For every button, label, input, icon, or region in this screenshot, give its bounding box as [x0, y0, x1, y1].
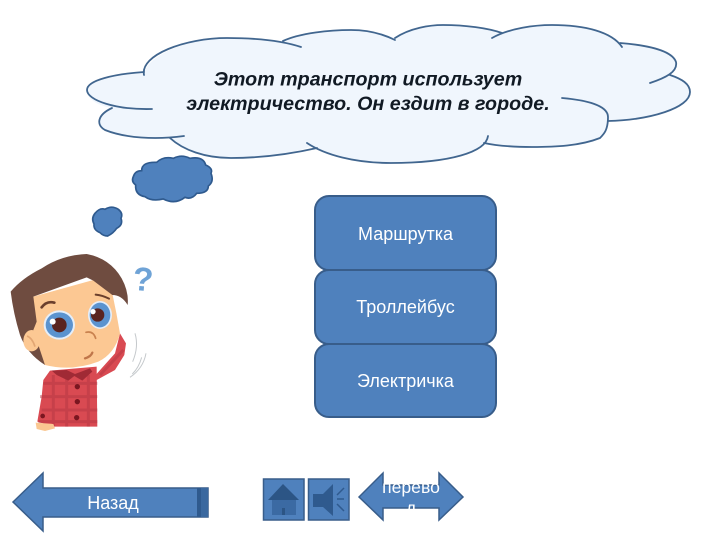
shirt plaid	[38, 350, 123, 427]
question text: Этот транспорт использует	[214, 68, 522, 90]
thought cloud with question: электричество. Он ездит в городе.	[186, 93, 550, 115]
collar	[52, 368, 92, 381]
cloud outline arcs	[87, 25, 690, 163]
answer button: Троллейбус: Троллейбус	[356, 297, 455, 317]
cloud fill	[87, 25, 690, 163]
small thought bubble	[93, 207, 122, 236]
back arrow button	[13, 473, 208, 531]
translate double arrow button: д	[406, 498, 416, 518]
shirt	[37, 367, 97, 427]
ear	[23, 330, 40, 351]
nose and mouth	[86, 332, 96, 338]
answer button: Троллейбус	[315, 270, 496, 344]
right eye	[88, 301, 112, 329]
hand	[36, 423, 55, 431]
back arrow button: Назад	[87, 493, 139, 513]
sound button	[308, 479, 349, 520]
home button	[264, 479, 304, 520]
thought cloud with question	[87, 25, 690, 163]
answer button: Маршрутка: Маршрутка	[358, 224, 454, 244]
hair	[11, 254, 128, 365]
answer button: Маршрутка	[315, 196, 496, 270]
scratch motion lines	[130, 333, 146, 377]
translate double arrow button	[359, 473, 463, 520]
raised arm	[96, 333, 126, 380]
left eye	[44, 310, 75, 340]
character: thinking boy	[11, 254, 155, 431]
question mark icon: ?	[131, 261, 155, 300]
medium thought bubble	[133, 156, 212, 202]
answer button: Электричка	[315, 344, 496, 417]
face	[32, 280, 120, 368]
shirt buttons	[40, 384, 80, 420]
eyebrows	[42, 302, 54, 307]
translate double arrow button: перево	[382, 477, 440, 497]
answer button: Электричка: Электричка	[357, 371, 455, 391]
